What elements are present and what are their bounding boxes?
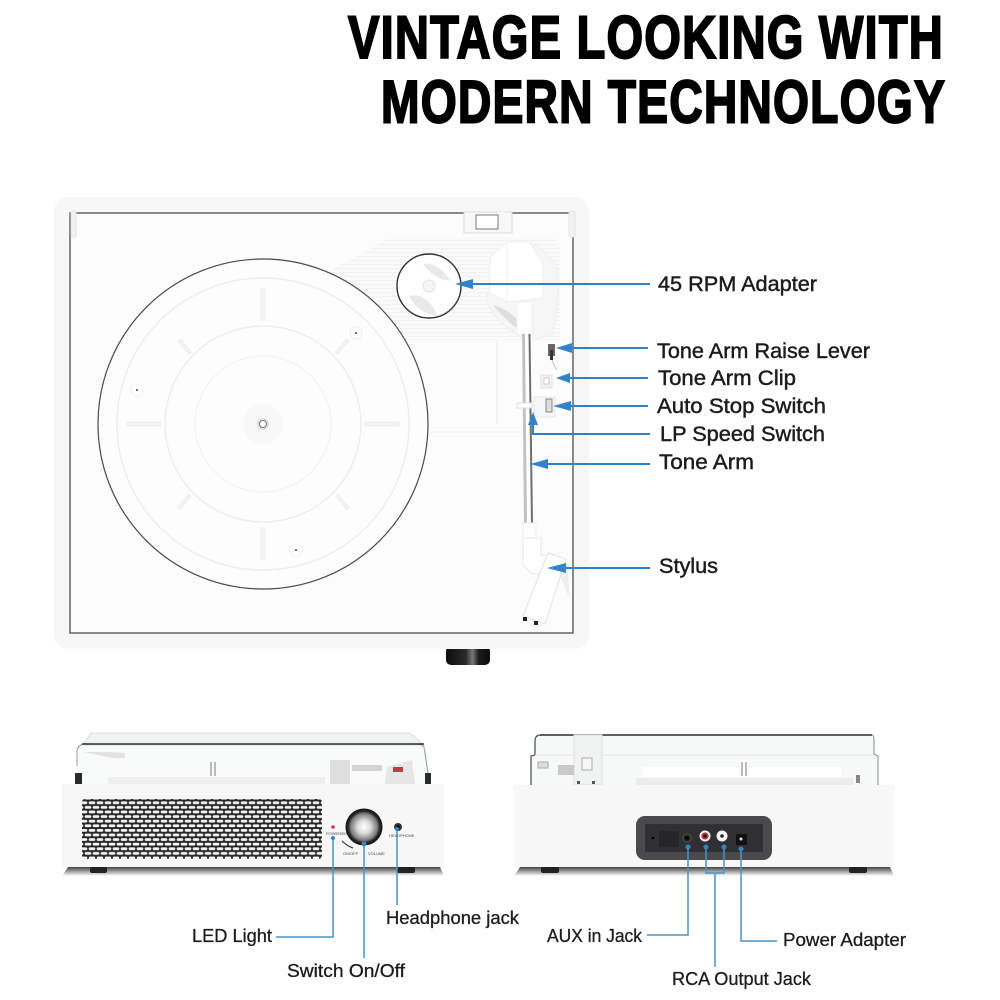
callout: power	[738, 846, 777, 941]
title	[348, 4, 946, 136]
arrow: lp speed switch	[528, 412, 650, 434]
label: headphone: Headphone jack	[386, 907, 520, 928]
cabinet	[514, 785, 894, 867]
rca white	[716, 830, 728, 842]
shadow and feet	[62, 867, 444, 876]
turntable top view	[54, 197, 589, 665]
label: 45 rpm adapter: 45 RPM Adapter	[658, 273, 817, 296]
lp speed slider	[517, 403, 532, 408]
shadow and feet	[514, 867, 894, 876]
headphone socket	[389, 823, 415, 838]
label: led light: LED Light	[192, 925, 272, 946]
turntable front view	[62, 733, 444, 876]
connector plate	[636, 816, 772, 860]
led light: POWER/BT	[326, 831, 348, 836]
power socket	[736, 834, 747, 845]
dust cover	[75, 733, 431, 784]
callout: led light	[276, 836, 335, 937]
lid frame	[54, 197, 589, 649]
volume knob	[342, 808, 385, 856]
arrow: tone arm clip	[556, 373, 648, 383]
cabinet	[62, 784, 444, 867]
auto stop switch	[534, 397, 555, 417]
left hinge tab	[71, 211, 76, 237]
stylus headshell	[523, 523, 570, 625]
callout: rca	[704, 844, 726, 967]
arrow: auto stop switch	[553, 401, 648, 411]
label: switch: Switch On/Off	[287, 960, 406, 981]
right hinge tab	[569, 211, 575, 237]
label: tone arm: Tone Arm	[659, 451, 754, 474]
headphone socket: HEADPHONE	[389, 833, 415, 838]
label: raise lever: Tone Arm Raise Lever	[657, 340, 870, 363]
tone arm head	[486, 242, 558, 342]
label: rca: RCA Output Jack	[672, 968, 812, 989]
aux jack	[683, 834, 691, 842]
label: aux: AUX in Jack	[547, 925, 643, 946]
callout: aux	[647, 844, 690, 935]
label: auto stop switch: Auto Stop Switch	[657, 395, 826, 418]
volume knob: ON/OFF	[343, 851, 359, 856]
arrow: tone arm	[530, 459, 650, 469]
lower deck plate lines	[430, 340, 525, 432]
label: stylus: Stylus	[659, 555, 718, 578]
turntable rear view	[514, 735, 894, 876]
speaker grille	[82, 799, 322, 859]
hinge clip	[464, 212, 512, 233]
tone arm clip	[541, 375, 552, 388]
callout: headphone	[395, 827, 399, 905]
arrow: 45 rpm adapter	[455, 279, 650, 289]
dust cover	[531, 735, 878, 785]
volume knob: VOLUME	[368, 851, 385, 856]
label: lp speed switch: LP Speed Switch	[660, 423, 825, 446]
callout: switch	[362, 842, 366, 958]
arrow: raise lever	[556, 343, 648, 353]
platter	[98, 259, 428, 589]
label: tone arm clip: Tone Arm Clip	[658, 367, 796, 390]
tone arm raise lever	[548, 344, 557, 370]
ribbed panel	[320, 237, 560, 340]
volume knob edge	[446, 646, 490, 665]
arrow: stylus	[547, 563, 650, 573]
label: power: Power Adapter	[783, 929, 906, 950]
45 rpm adapter	[397, 254, 461, 318]
inner deck	[70, 213, 573, 633]
led light	[326, 825, 348, 836]
rca red	[700, 830, 710, 842]
tone arm rod	[522, 334, 535, 524]
